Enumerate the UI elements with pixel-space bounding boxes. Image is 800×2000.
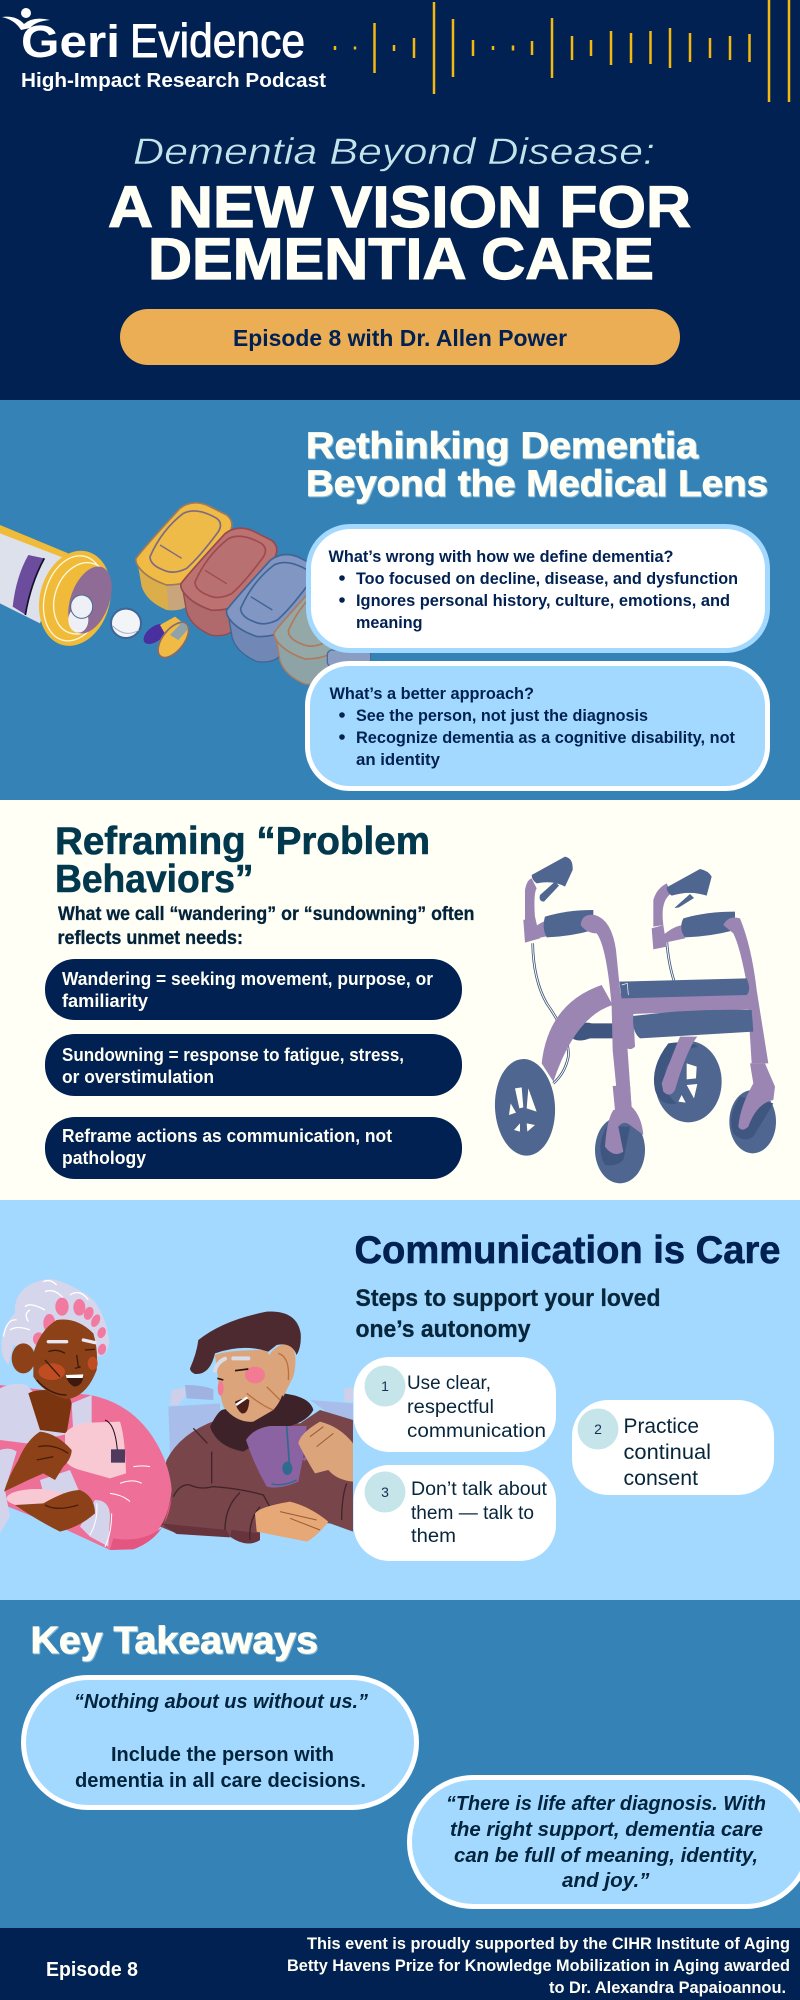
title: A NEW VISION FOR (108, 175, 691, 240)
step 2: 2 (594, 1421, 602, 1437)
acknowledgement: to Dr. Alexandra Papaioannou. (549, 1978, 786, 1997)
bubble: nothing about us: Include the person with (111, 1743, 334, 1766)
intro text: What we call “wandering” or “sundowning” often (58, 904, 474, 925)
heading: Beyond the Medical Lens (306, 463, 768, 504)
bubble: life after diagnosis: “There is life after diagnosis. With (446, 1792, 766, 1815)
heading: Reframing “Problem (55, 820, 430, 863)
tagline: High-Impact Research Podcast (21, 69, 326, 92)
right handle assembly (652, 869, 735, 949)
pill: reframe actions: pathology (62, 1148, 146, 1168)
step 1: 1 (381, 1378, 389, 1394)
panel: key takeaways (0, 1600, 800, 1928)
episode pill (120, 309, 680, 365)
illustration: spilled pill bottle (0, 525, 121, 654)
left handle assembly (523, 857, 593, 943)
bubble: life after diagnosis: the right support, dementia care (450, 1818, 763, 1841)
bubble: life after diagnosis: and joy.” (562, 1869, 650, 1892)
heading (55, 820, 430, 901)
step 1 (354, 1357, 556, 1452)
heading: Key Takeaways (30, 1620, 318, 1662)
pill: reframe actions: Reframe actions as communication, not (62, 1126, 392, 1146)
card: better approach: Recognize dementia as a cognitive disability, not (356, 728, 735, 747)
subtitle: Dementia Beyond Disease: (133, 131, 655, 172)
subheading: one’s autonomy (356, 1316, 531, 1343)
bubble: life after diagnosis (410, 1778, 800, 1906)
subheading: Steps to support your loved (356, 1285, 660, 1312)
pill: reframe actions (45, 1117, 462, 1179)
pill: sundowning: or overstimulation (62, 1067, 214, 1087)
intro text: reflects unmet needs: (58, 928, 243, 949)
step 3: 3 (381, 1484, 389, 1500)
panel: header (0, 0, 800, 400)
step 3: them (411, 1526, 456, 1547)
step 2: Practice (624, 1415, 699, 1438)
step 1: respectful (407, 1397, 494, 1418)
step 1: Use clear, (407, 1373, 491, 1394)
bubble: life after diagnosis: can be full of meaning, identity, (454, 1844, 758, 1867)
step 2: consent (624, 1467, 698, 1490)
step 3: Don’t talk about (411, 1479, 548, 1500)
card: what's wrong: meaning (356, 613, 422, 632)
heading (306, 425, 768, 504)
illustration: pill organizer boxes (136, 503, 371, 684)
card: what's wrong: What’s wrong with how we define dementia? (328, 547, 674, 566)
pill: wandering: Wandering = seeking movement, purpose, or (62, 969, 433, 989)
pill: wandering: familiarity (62, 991, 148, 1011)
acknowledgement (287, 1934, 790, 1997)
title: DEMENTIA CARE (148, 227, 654, 292)
illustration: rollator walker (493, 857, 776, 1183)
illustration: laughing woman with cup (0, 1279, 172, 1550)
logo: GeriEvidence: Evidence (130, 14, 305, 67)
card: what's wrong (308, 526, 768, 650)
footer (0, 1928, 800, 2000)
panel: rethinking dementia (0, 400, 800, 800)
acknowledgement: Betty Havens Prize for Knowledge Mobilization in Aging awarded (287, 1956, 790, 1975)
title (108, 175, 691, 292)
card: better approach: See the person, not just the diagnosis (356, 706, 648, 725)
logo: GeriEvidence: Geri (21, 16, 120, 67)
panel: communication is care (0, 1200, 800, 1600)
heading: Communication is Care (354, 1229, 780, 1272)
episode pill: Episode 8 with Dr. Allen Power (233, 325, 567, 351)
subheading (356, 1285, 660, 1343)
card: what's wrong: Too focused on decline, disease, and dysfunction (356, 569, 738, 588)
card: better approach: What’s a better approach? (330, 684, 534, 703)
pill: sundowning (45, 1034, 462, 1096)
step 2 (572, 1400, 774, 1495)
step 1: communication (407, 1421, 546, 1442)
step 3: them — talk to (411, 1503, 534, 1524)
card: better approach (308, 664, 768, 788)
step 3 (354, 1465, 556, 1561)
illustration: loose pills (111, 609, 194, 663)
illustration: laughing man with mug (160, 1312, 353, 1543)
heading: Behaviors” (55, 858, 254, 901)
bubble: nothing about us (24, 1678, 416, 1808)
card: better approach: an identity (356, 750, 441, 769)
card: what's wrong: Ignores personal history, culture, emotions, and (356, 591, 730, 610)
logo: GeriEvidence (2, 8, 305, 67)
pill: wandering (45, 959, 462, 1020)
bubble: nothing about us: dementia in all care decisions. (75, 1769, 366, 1792)
bubble: nothing about us: “Nothing about us without us.” (74, 1690, 369, 1713)
audio waveform (335, 0, 789, 102)
pill: sundowning: Sundowning = response to fatigue, stress, (62, 1045, 404, 1065)
intro text (58, 904, 474, 949)
heading: Rethinking Dementia (306, 425, 698, 466)
step 2: continual (624, 1441, 711, 1464)
episode label: Episode 8 (46, 1959, 138, 1981)
panel: reframing problem behaviors (0, 800, 800, 1200)
acknowledgement: This event is proudly supported by the CIHR Institute of Aging (307, 1934, 790, 1953)
